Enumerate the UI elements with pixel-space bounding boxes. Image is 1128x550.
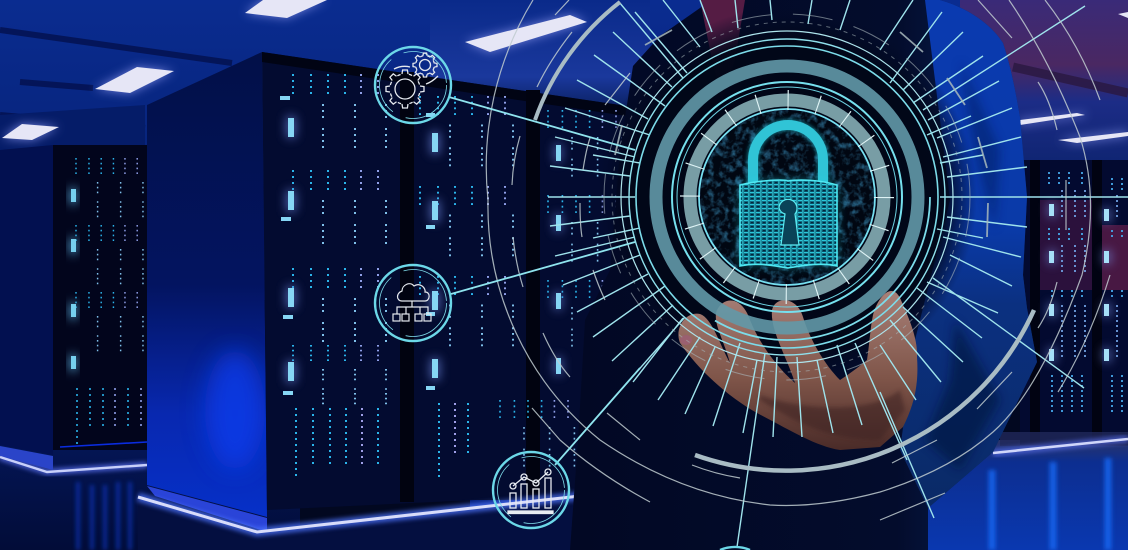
keyhole [779,199,799,245]
hologram: rings [604,14,970,380]
hologram dark core [597,7,977,387]
hologram: thick arcs [535,2,1034,471]
icon: partial circle at bottom [720,547,750,550]
ceiling lights [2,0,1128,143]
hand [678,291,917,450]
icon: bar chart [493,452,569,528]
hologram: thin arcs [486,0,1110,520]
hologram: radial lines [548,0,1128,547]
server rack: left [0,145,147,472]
icon: cloud network [375,265,451,341]
hologram: short grey arc segments [615,30,988,237]
floor [0,440,1128,550]
man in suit [570,0,1037,550]
connector lines [449,97,640,465]
server rack: right [993,160,1128,453]
background: ceiling [0,0,1128,300]
server rack: centre [138,52,640,550]
padlock emblem [700,110,874,284]
icon: gears [375,47,451,123]
